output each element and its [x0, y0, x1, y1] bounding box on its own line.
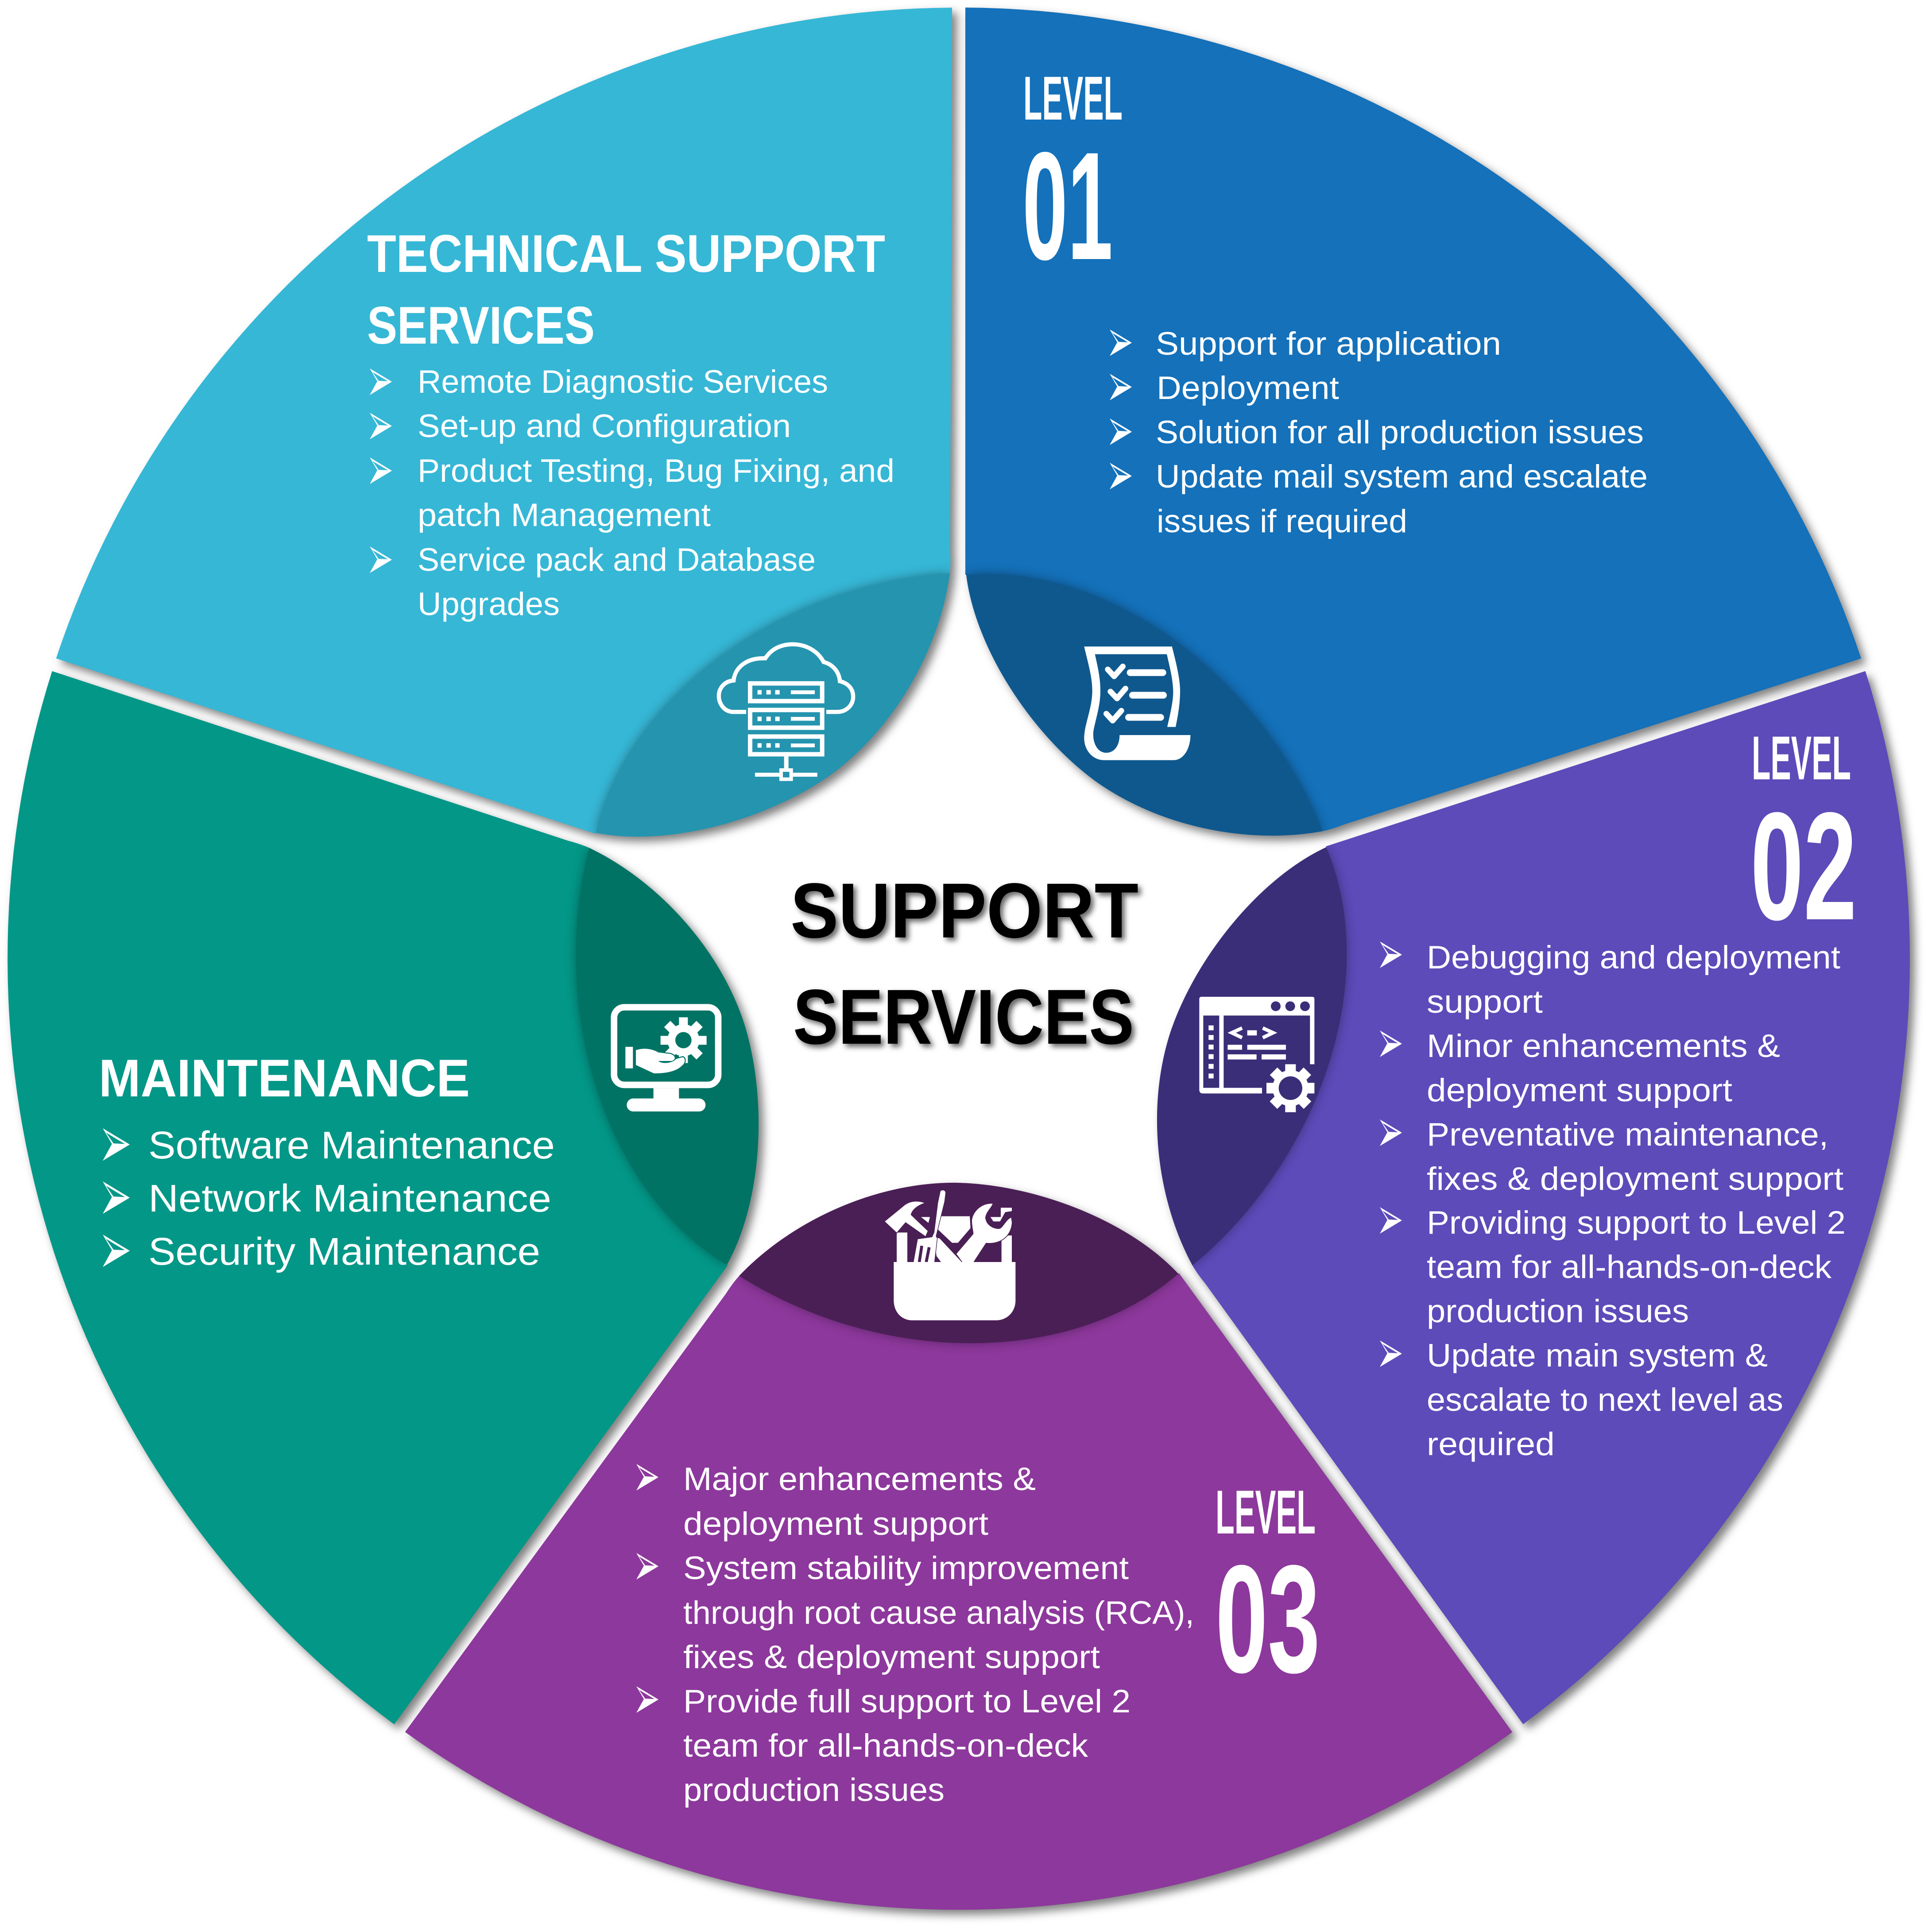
heading: level 01: 01: [1022, 120, 1113, 292]
icon: code window with gear: [1199, 997, 1314, 1112]
list: level 02 items: fixes & deployment support: [1427, 1161, 1843, 1197]
heading: technical support services: SERVICES: [367, 296, 595, 355]
list: technical support items: Remote Diagnostic Services: [418, 364, 828, 400]
list: level 02 items: Minor enhancements &: [1427, 1028, 1780, 1064]
list: level 02 items: Preventative maintenance,: [1427, 1117, 1828, 1153]
list: level 01 items: Solution for all production issues: [1156, 414, 1644, 450]
panel: level 03: [405, 1183, 1512, 1910]
heading: level 01: [1022, 63, 1123, 292]
list: level 02 items: Debugging and deployment: [1427, 940, 1840, 976]
list: level 02 items: Update main system &: [1427, 1338, 1768, 1374]
list: level 02 items: team for all-hands-on-deck: [1427, 1249, 1832, 1285]
list: level 02 items: deployment support: [1427, 1072, 1732, 1108]
list: level 03 items: production issues: [683, 1772, 945, 1808]
segment: level 02 background: [1157, 671, 1910, 1724]
heading: level 03: [1216, 1477, 1320, 1705]
list: maintenance items: Security Maintenance: [148, 1230, 540, 1273]
heading: maintenance: MAINTENANCE: [99, 1049, 470, 1108]
list: level 03 items: System stability improvement: [683, 1550, 1129, 1586]
segment: level 01 background: [965, 8, 1861, 836]
icon: checklist scroll: [1084, 647, 1190, 760]
lens: maintenance darker area: [576, 848, 759, 1265]
panel: level 01: LEVEL: [1023, 63, 1123, 133]
list: level 02 items: escalate to next level as: [1427, 1382, 1783, 1418]
segment: technical support background: [56, 8, 952, 836]
list: technical support items: Product Testing, Bug Fixing, and: [418, 453, 894, 489]
panel: level 02: [1157, 671, 1910, 1724]
segment: maintenance background: [8, 671, 759, 1724]
heading: level 03: 03: [1216, 1533, 1320, 1705]
lens: level 03 darker area: [739, 1183, 1178, 1343]
icon: toolbox: [885, 1190, 1015, 1320]
icon: cloud server: [719, 644, 853, 779]
title: support services: [790, 867, 1138, 1061]
list: level 02 items: support: [1427, 984, 1543, 1020]
icon: monitor with hand and gear: [614, 1007, 718, 1111]
lens: technical support darker area: [596, 573, 950, 836]
heading: level 02: [1750, 723, 1857, 952]
panel: maintenance: [8, 671, 759, 1724]
panel: technical support services: [56, 8, 952, 836]
list: level 01 items: Support for application: [1156, 326, 1501, 362]
list: level 02 items: production issues: [1427, 1293, 1689, 1329]
panel: level 01: [965, 8, 1861, 836]
heading: level 02: 02: [1750, 780, 1857, 952]
list: maintenance items: Network Maintenance: [148, 1177, 551, 1220]
lens: level 01 darker area: [966, 574, 1323, 836]
heading: level 03: LEVEL: [1216, 1477, 1316, 1547]
list: level 03 items: team for all-hands-on-deck: [683, 1728, 1088, 1764]
list: level 02 items: Providing support to Level 2: [1427, 1205, 1846, 1241]
title: support services: SUPPORT: [790, 867, 1138, 954]
list: level 01 items: [1110, 326, 1648, 539]
list: technical support items: [370, 364, 894, 622]
lens: level 02 darker area: [1157, 847, 1347, 1266]
list: technical support items: Upgrades: [418, 586, 560, 622]
title: support services: SERVICES: [793, 974, 1134, 1061]
list: level 03 items: fixes & deployment support: [683, 1639, 1100, 1675]
list: technical support items: Set-up and Configuration: [418, 408, 791, 444]
list: level 02 items: required: [1427, 1426, 1555, 1462]
list: level 03 items: Provide full support to Level 2: [683, 1684, 1131, 1719]
list: level 01 items: Update mail system and escalate: [1156, 459, 1648, 495]
segment: level 03 background: [405, 1183, 1512, 1910]
list: maintenance items: Software Maintenance: [148, 1124, 555, 1167]
heading: technical support services: [367, 224, 885, 355]
list: level 03 items: through root cause analysis (RCA),: [683, 1595, 1194, 1631]
list: level 03 items: deployment support: [683, 1506, 988, 1542]
list: level 02 items: [1380, 940, 1846, 1462]
list: level 01 items: issues if required: [1157, 503, 1407, 539]
list: technical support items: Service pack and Database: [418, 542, 816, 578]
list: maintenance items: [103, 1124, 555, 1273]
list: level 01 items: Deployment: [1157, 370, 1339, 406]
list: technical support items: patch Management: [418, 497, 711, 533]
list: level 03 items: [636, 1461, 1194, 1808]
heading: technical support services: TECHNICAL SUPPORT: [367, 224, 885, 283]
list: level 03 items: Major enhancements &: [683, 1461, 1036, 1497]
